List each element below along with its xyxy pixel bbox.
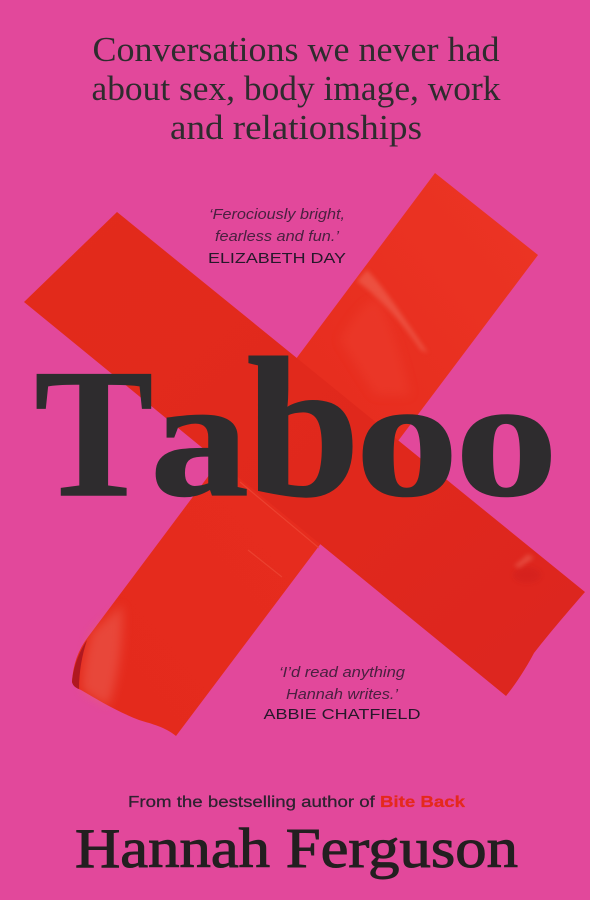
- tape curl: [72, 640, 87, 689]
- tape: overlap edge: [240, 482, 319, 577]
- quote: Abbie Chatfield: ABBIE CHATFIELD: [264, 706, 421, 723]
- quote: Elizabeth Day: ‘Ferociously bright,: [209, 206, 345, 223]
- tape: upper-left to lower-right strip: [24, 212, 585, 696]
- author name: Hannah Ferguson: [75, 818, 518, 880]
- headline: and relationships: [170, 108, 422, 147]
- title: a: [150, 344, 249, 532]
- title: [34, 317, 558, 539]
- title: T: [34, 332, 153, 536]
- tape sheen: [340, 300, 410, 395]
- headline: Conversations we never had: [92, 30, 500, 69]
- tape shadow: [513, 567, 541, 583]
- tape: lower-left to upper-right strip: [72, 173, 538, 736]
- title: b: [247, 317, 360, 539]
- quote: Abbie Chatfield: Hannah writes.’: [286, 686, 399, 703]
- quote: Elizabeth Day: [208, 206, 346, 267]
- quote: Abbie Chatfield: [264, 664, 421, 723]
- headline: about sex, body image, work: [92, 69, 501, 108]
- headline: [92, 30, 501, 147]
- tagline: From the bestselling author of Bite Back: [128, 794, 465, 811]
- tape crease lower: [514, 554, 534, 568]
- quote: Abbie Chatfield: ‘I’d read anything: [279, 664, 406, 681]
- quote: Elizabeth Day: ELIZABETH DAY: [208, 250, 346, 267]
- title: o: [455, 344, 558, 532]
- quote: Elizabeth Day: fearless and fun.’: [215, 228, 340, 245]
- tape highlight: [82, 605, 122, 706]
- title: o: [356, 344, 458, 532]
- tape crease upper: [357, 270, 428, 353]
